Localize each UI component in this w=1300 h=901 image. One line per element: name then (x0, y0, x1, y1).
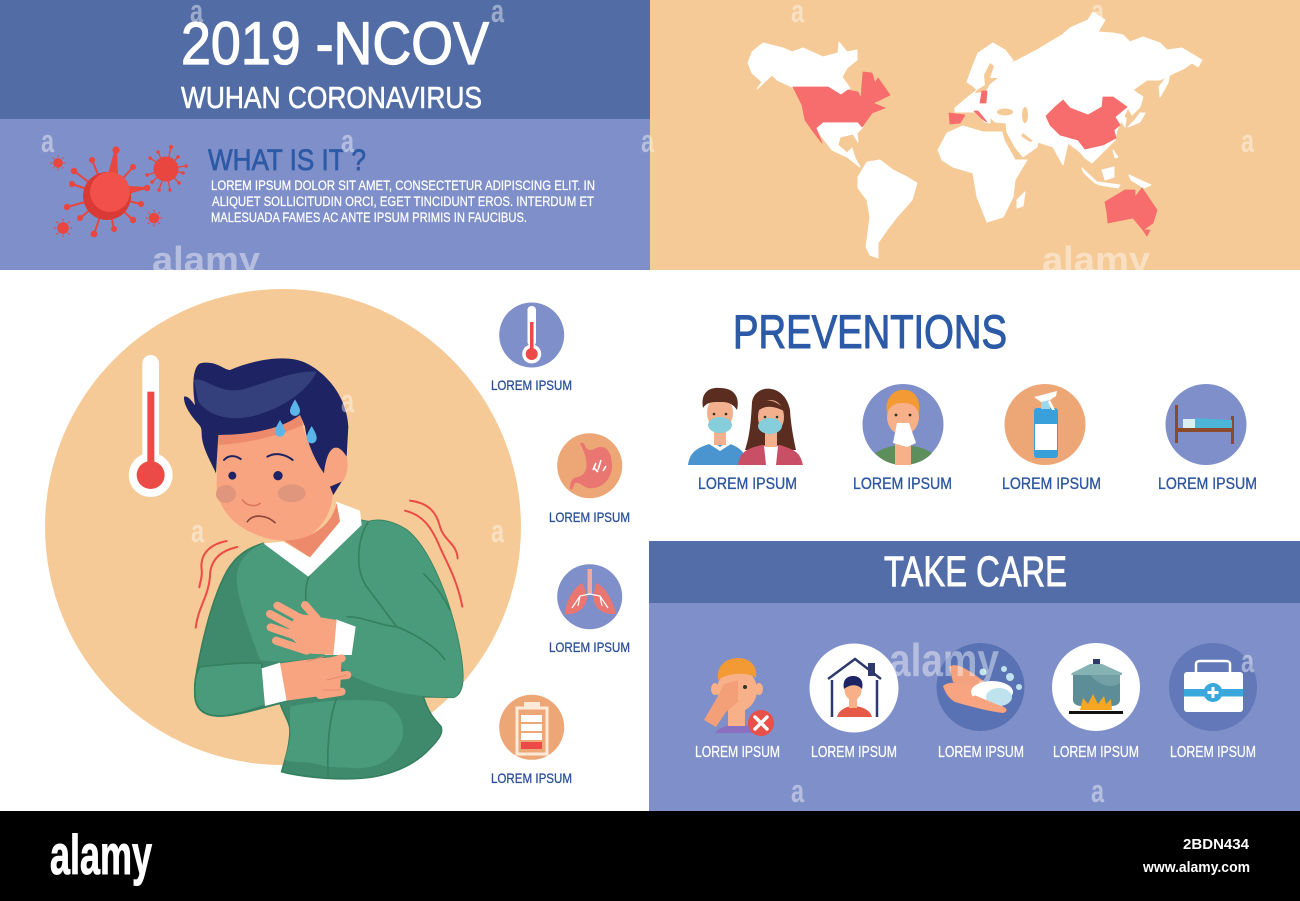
title: 2019-nCoV: 2019 -NCOV (181, 10, 489, 77)
icon: virus cluster (50, 145, 188, 237)
panel: what is it (0, 119, 650, 270)
footer bar (0, 811, 1300, 901)
care: boil food (1052, 643, 1140, 761)
watermarks: a (341, 123, 354, 159)
watermarks: alamy (889, 634, 999, 686)
circle: patient backdrop (45, 289, 521, 765)
symptom: low battery (491, 695, 572, 786)
map: inland seas (975, 63, 1033, 142)
symptom: stomach (549, 433, 630, 525)
prevention: cover sneeze: LOREM IPSUM (853, 474, 952, 493)
watermarks: a (1241, 123, 1254, 159)
heading: what is it: WHAT IS IT ? (208, 144, 366, 177)
care: do not touch face: LOREM IPSUM (695, 744, 780, 761)
hair (184, 358, 348, 473)
care: wash hands (936, 643, 1024, 761)
symptom: fever: LOREM IPSUM (491, 377, 572, 393)
prevention: disinfectant spray (1002, 384, 1101, 493)
care: stay home: LOREM IPSUM (811, 744, 897, 761)
care: do not touch face (695, 658, 780, 761)
map: land masses (748, 12, 1202, 258)
symptom: fever (491, 302, 572, 393)
text block: description: ALIQUET SOLLICITUDIN ORCI, EGET TINCIDUNT EROS. INTERDUM ET (212, 194, 594, 209)
head (216, 415, 348, 540)
watermarks: alamy (152, 239, 260, 280)
panel: title header (0, 0, 650, 119)
watermarks: a (341, 383, 354, 419)
care: wash hands: LOREM IPSUM (938, 744, 1024, 761)
care: boil food: LOREM IPSUM (1053, 744, 1139, 761)
prevention: cover sneeze (853, 384, 952, 493)
icon: fever thermometer (129, 355, 173, 497)
icon: sweat drops (275, 399, 317, 443)
prevention: wear masks (688, 388, 803, 493)
watermarks: a (491, 513, 504, 549)
care: first aid kit: LOREM IPSUM (1170, 744, 1256, 761)
symptom: stomach: LOREM IPSUM (549, 509, 630, 525)
shiver lines (196, 501, 462, 628)
watermarks: a (1091, 773, 1104, 809)
watermarks: a (191, 513, 204, 549)
subtitle: Wuhan coronavirus: WUHAN CORONAVIRUS (181, 80, 482, 115)
prevention: disinfectant spray: LOREM IPSUM (1002, 474, 1101, 493)
text block: description: MALESUADA FAMES AC ANTE IPSUM PRIMIS IN FAUCIBUS. (211, 210, 527, 225)
prevention: rest in bed: LOREM IPSUM (1158, 474, 1257, 493)
footer logo: alamy (50, 823, 152, 886)
map: affected countries (793, 72, 1157, 236)
neck (283, 503, 340, 557)
prevention: wear masks: LOREM IPSUM (698, 474, 797, 493)
care: stay home (810, 644, 898, 761)
symptom: lungs: LOREM IPSUM (549, 639, 630, 655)
site url: www.alamy.com (1142, 859, 1250, 876)
watermarks: a (791, 773, 804, 809)
watermarks: a (641, 123, 654, 159)
image id: 2BDN434 (1183, 836, 1250, 853)
prevention: rest in bed (1158, 384, 1257, 493)
hands and cuffs (262, 605, 356, 706)
watermarks: a (41, 123, 54, 159)
symptom: lungs (549, 564, 630, 655)
watermarks: alamy (1042, 239, 1150, 280)
heading: take care: TAKE CARE (884, 548, 1067, 596)
sweater (195, 520, 463, 779)
symptom: low battery: LOREM IPSUM (491, 770, 572, 786)
care: first aid kit (1169, 643, 1257, 761)
watermarks: a (1241, 643, 1254, 679)
panel: world map (650, 0, 1300, 270)
heading: preventions: PREVENTIONS (733, 305, 1007, 358)
collar (263, 502, 362, 577)
illustration: sick man (129, 355, 463, 779)
text block: description (211, 178, 595, 225)
panel: take care (649, 541, 1300, 811)
text block: description: LOREM IPSUM DOLOR SIT AMET, CONSECTETUR ADIPISCING ELIT. IN (211, 178, 595, 193)
